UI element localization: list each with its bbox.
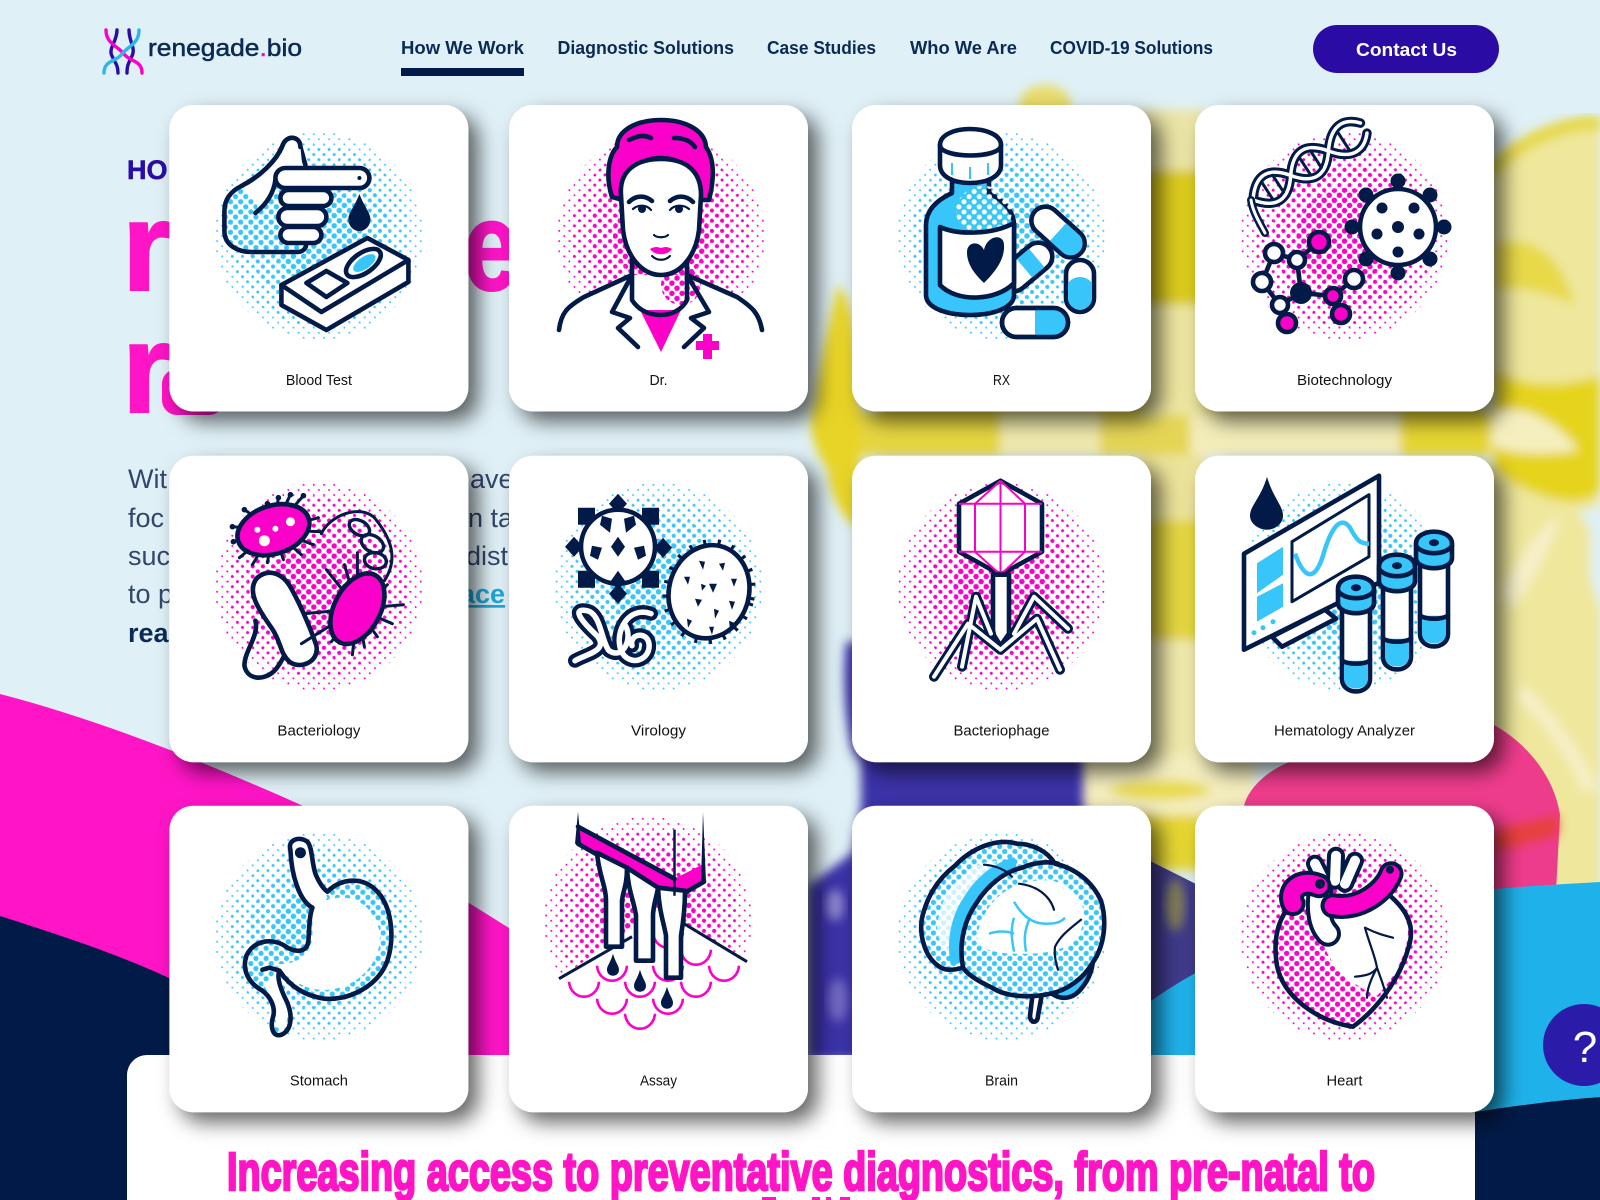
icon: anatomical heart xyxy=(1276,856,1411,1027)
help button: ? xyxy=(1573,1023,1597,1072)
navigation: Who We Are xyxy=(910,38,1017,58)
card: Biotechnology xyxy=(1195,105,1494,412)
label: Assay xyxy=(640,1073,677,1090)
icon: pill bottle and capsules xyxy=(926,129,1094,337)
halftone xyxy=(1240,132,1448,340)
icon: assay pipettes xyxy=(559,812,747,1086)
halftone xyxy=(898,483,1106,691)
card: Bacteriophage xyxy=(852,456,1151,762)
icon: hand and test cassette xyxy=(224,138,408,330)
label: RX xyxy=(993,372,1010,389)
navigation: COVID-19 Solutions xyxy=(1050,38,1213,58)
hero headline fragments xyxy=(122,176,519,439)
background photo: blurred portrait xyxy=(808,85,1600,1060)
help button xyxy=(1543,1004,1600,1086)
halftone xyxy=(557,132,765,340)
label: Biotechnology xyxy=(1297,372,1393,389)
contact button: Contact Us xyxy=(1356,39,1457,60)
hero paragraph fragments: foc xyxy=(128,503,164,533)
bottom white panel xyxy=(127,1055,1475,1200)
logo: renegade .bio xyxy=(148,35,302,62)
icon: analyzer and tubes xyxy=(1244,476,1452,691)
card: Brain xyxy=(852,806,1151,1112)
label: Stomach xyxy=(290,1073,348,1090)
halftone xyxy=(215,833,423,1041)
hero paragraph fragments: to p xyxy=(128,579,173,609)
navy wave left xyxy=(0,916,320,1200)
navy wave right xyxy=(1475,1097,1600,1200)
navigation: Case Studies xyxy=(767,38,876,58)
halftone xyxy=(215,483,423,691)
card: Hematology Analyzer xyxy=(1195,456,1494,762)
label: Blood Test xyxy=(286,372,353,389)
card: Stomach xyxy=(169,806,468,1112)
navigation: How We Work xyxy=(401,38,525,58)
navigation xyxy=(401,38,1213,76)
label: Dr. xyxy=(650,372,668,389)
magenta wave xyxy=(0,694,790,1060)
label: Virology xyxy=(631,723,687,740)
hero paragraph fragments: ace xyxy=(460,579,505,609)
card: RX xyxy=(852,105,1151,412)
hero paragraph fragments: Wit xyxy=(128,464,167,494)
hero paragraph fragments xyxy=(128,464,517,648)
halftone xyxy=(554,483,762,691)
label: Brain xyxy=(985,1073,1018,1090)
halftone xyxy=(544,817,752,1025)
icon: bacteriophage xyxy=(934,481,1068,677)
navigation: Diagnostic Solutions xyxy=(558,38,734,58)
icon: brain xyxy=(921,842,1104,1022)
icon: doctor portrait xyxy=(559,120,762,359)
hero headline fragments: r xyxy=(122,298,171,439)
label: Bacteriology xyxy=(277,723,361,740)
icon: viruses xyxy=(565,494,762,661)
card: Virology xyxy=(509,456,808,762)
label: Heart xyxy=(1326,1073,1363,1090)
card: Blood Test xyxy=(169,105,468,412)
icon: stomach xyxy=(245,839,391,1035)
halftone xyxy=(1240,483,1448,691)
hero headline fragments: e xyxy=(463,176,519,317)
hero paragraph fragments: ave xyxy=(470,464,514,494)
hero paragraph fragments: n ta xyxy=(468,503,514,533)
hero paragraph fragments: distr xyxy=(466,541,517,571)
hero paragraph fragments: suc xyxy=(128,541,170,571)
card: Assay xyxy=(509,806,808,1112)
hero eyebrow: HO xyxy=(127,155,168,185)
halftone xyxy=(1240,833,1448,1041)
label: Bacteriophage xyxy=(954,723,1050,740)
hero paragraph fragments: rea xyxy=(128,618,170,648)
halftone xyxy=(215,132,423,340)
card: Heart xyxy=(1195,806,1494,1112)
cyan wave xyxy=(1090,882,1600,1112)
contact button xyxy=(1313,25,1499,73)
card: Dr. xyxy=(509,105,808,412)
halftone xyxy=(898,132,1106,340)
icon: bacteria xyxy=(230,492,403,678)
halftone xyxy=(898,833,1106,1041)
icon: DNA, virus and molecule xyxy=(1244,115,1452,332)
label: Hematology Analyzer xyxy=(1274,723,1415,740)
card: Bacteriology xyxy=(169,456,468,762)
logo xyxy=(104,30,302,73)
hero headline fragments: r xyxy=(122,176,171,317)
